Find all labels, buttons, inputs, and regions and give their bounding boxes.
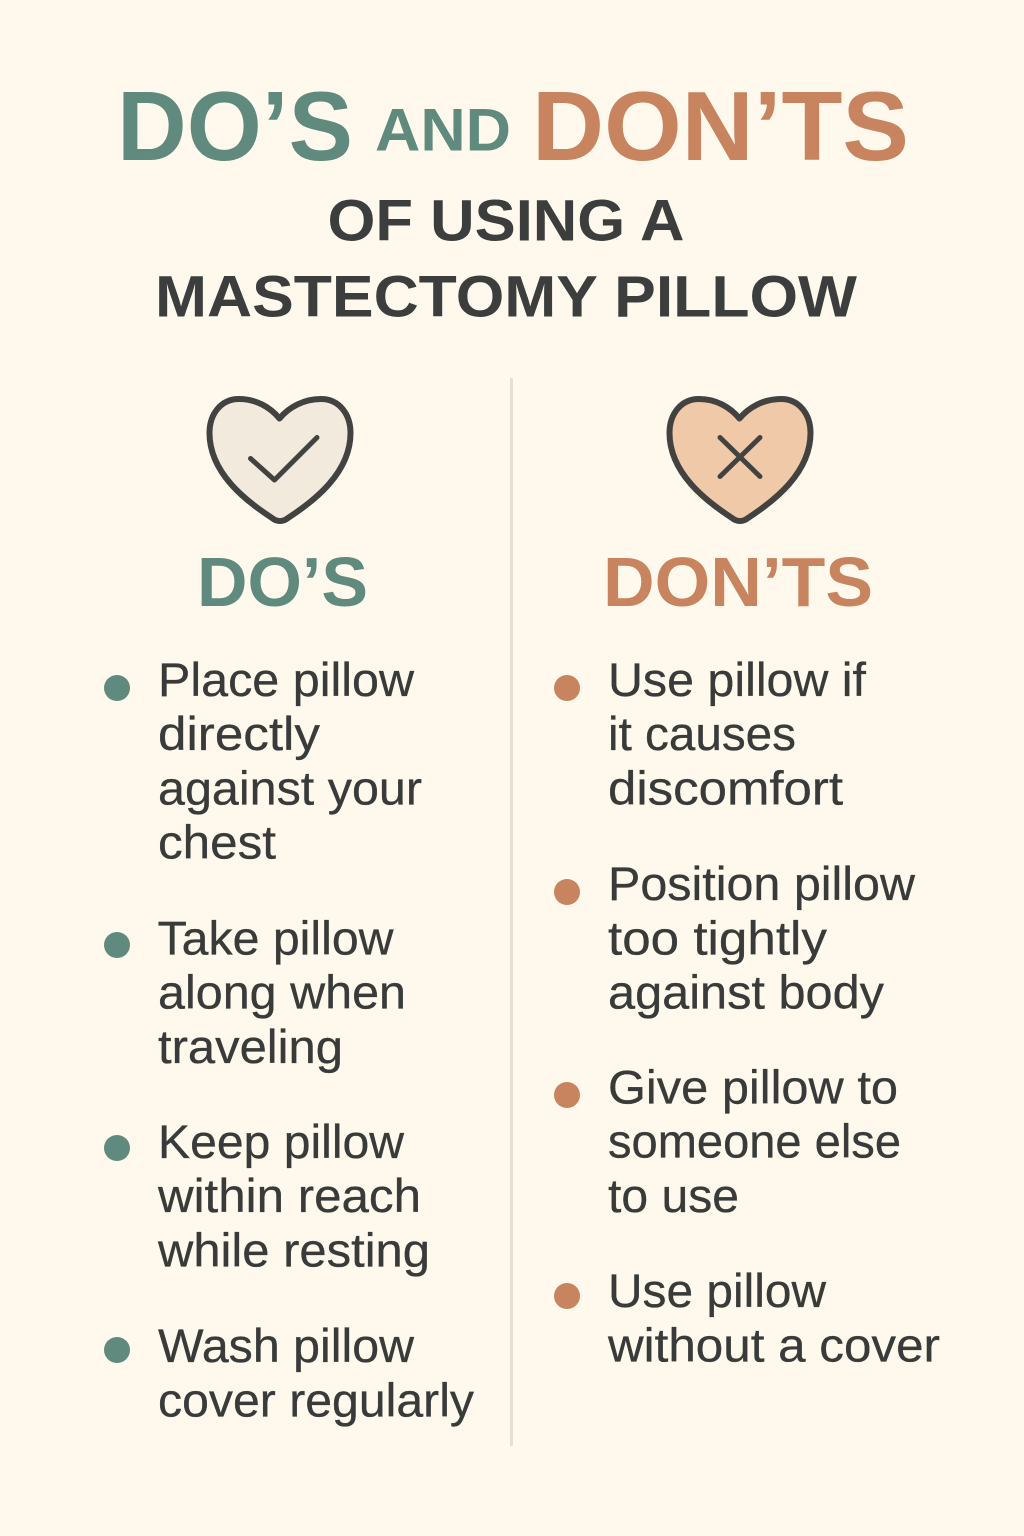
title word: AND: AND [375,96,511,164]
title word: DON'TS: DON’TS [532,71,909,181]
title word: DO'S: DO’S [117,71,353,181]
center divider [510,378,513,1446]
title [117,71,909,330]
do item 4: cover regularly [158,1374,474,1427]
icon: heart with cross [670,399,810,521]
don't item 4: without a cover [607,1319,940,1372]
do item 4: Wash pillow [158,1320,415,1373]
do item 1: chest [158,816,276,870]
do item 3: while resting [157,1225,430,1278]
don't item 2: Position pillow [608,858,916,911]
do item 1: directly [158,708,320,761]
don't item 1: Use pillow if [608,654,867,707]
do item 4 [104,1320,474,1427]
don't item 3: Give pillow to [608,1061,898,1114]
don't item 1: it causes [608,708,796,761]
heading: DO'S: DO’S [197,543,368,621]
don't item 4: Use pillow [608,1265,827,1318]
do item 1: against your [158,762,422,816]
panel: don'ts list [554,654,940,1372]
don't item 2 [554,858,916,1020]
don't item 1: discomfort [608,762,843,816]
do item 2: along when [158,967,406,1020]
do item 2 [104,912,406,1074]
don't item 4 [554,1265,940,1372]
subtitle line 1: OF USING A [328,188,684,254]
do item 3 [104,1116,430,1278]
don't item 2: too tightly [608,912,827,965]
do item 2: traveling [158,1021,343,1074]
don't item 1 [554,654,867,816]
don't item 3: to use [608,1170,739,1223]
subtitle line 2: MASTECTOMY PILLOW [155,264,858,330]
heading: DON'TS: DON’TS [603,543,873,621]
do item 1 [104,654,422,870]
don't item 3: someone else [608,1116,901,1169]
do item 3: within reach [157,1170,421,1223]
don't item 2: against body [608,967,884,1020]
do item 2: Take pillow [158,912,394,965]
do item 3: Keep pillow [158,1116,405,1169]
don't item 3 [554,1061,901,1223]
icon: heart with check [210,399,350,521]
do item 1: Place pillow [158,654,415,707]
panel: do's list [104,654,474,1427]
